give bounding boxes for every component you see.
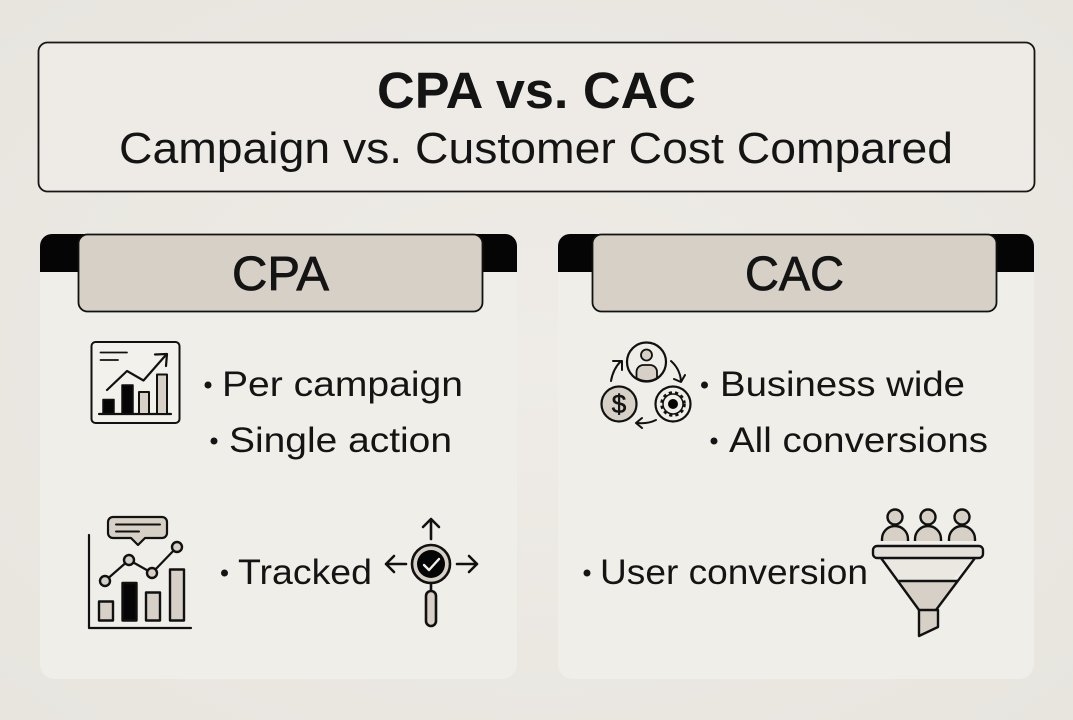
icon: line and bar chart with speech bubble xyxy=(89,517,191,628)
bullet: user conversion: User conversion xyxy=(600,553,868,592)
title banner xyxy=(38,42,1034,192)
icon: magnifier with arrows xyxy=(386,519,477,626)
icon: customer, money and gear cycle: $ xyxy=(612,389,627,419)
bullet: per campaign: Per campaign xyxy=(222,365,463,404)
panel: CAC xyxy=(558,234,1034,679)
CAC heading tab: CAC xyxy=(745,248,844,301)
CPA heading tab xyxy=(78,234,482,312)
icon: user funnel xyxy=(873,510,983,636)
bullet: tracked: Tracked xyxy=(238,553,372,592)
CAC heading tab xyxy=(592,234,996,312)
title: CPA vs. CAC xyxy=(377,62,696,119)
bullet: single action: Single action xyxy=(229,421,452,460)
bullet: business wide: Business wide xyxy=(720,365,965,404)
CPA heading tab: CPA xyxy=(232,248,329,301)
panel: CPA xyxy=(40,234,517,679)
bullet: all conversions: All conversions xyxy=(729,421,988,460)
icon: rising bar chart xyxy=(92,342,180,423)
icon: customer, money and gear cycle xyxy=(602,342,690,428)
subtitle: Campaign vs. Customer Cost Compared xyxy=(119,124,953,173)
